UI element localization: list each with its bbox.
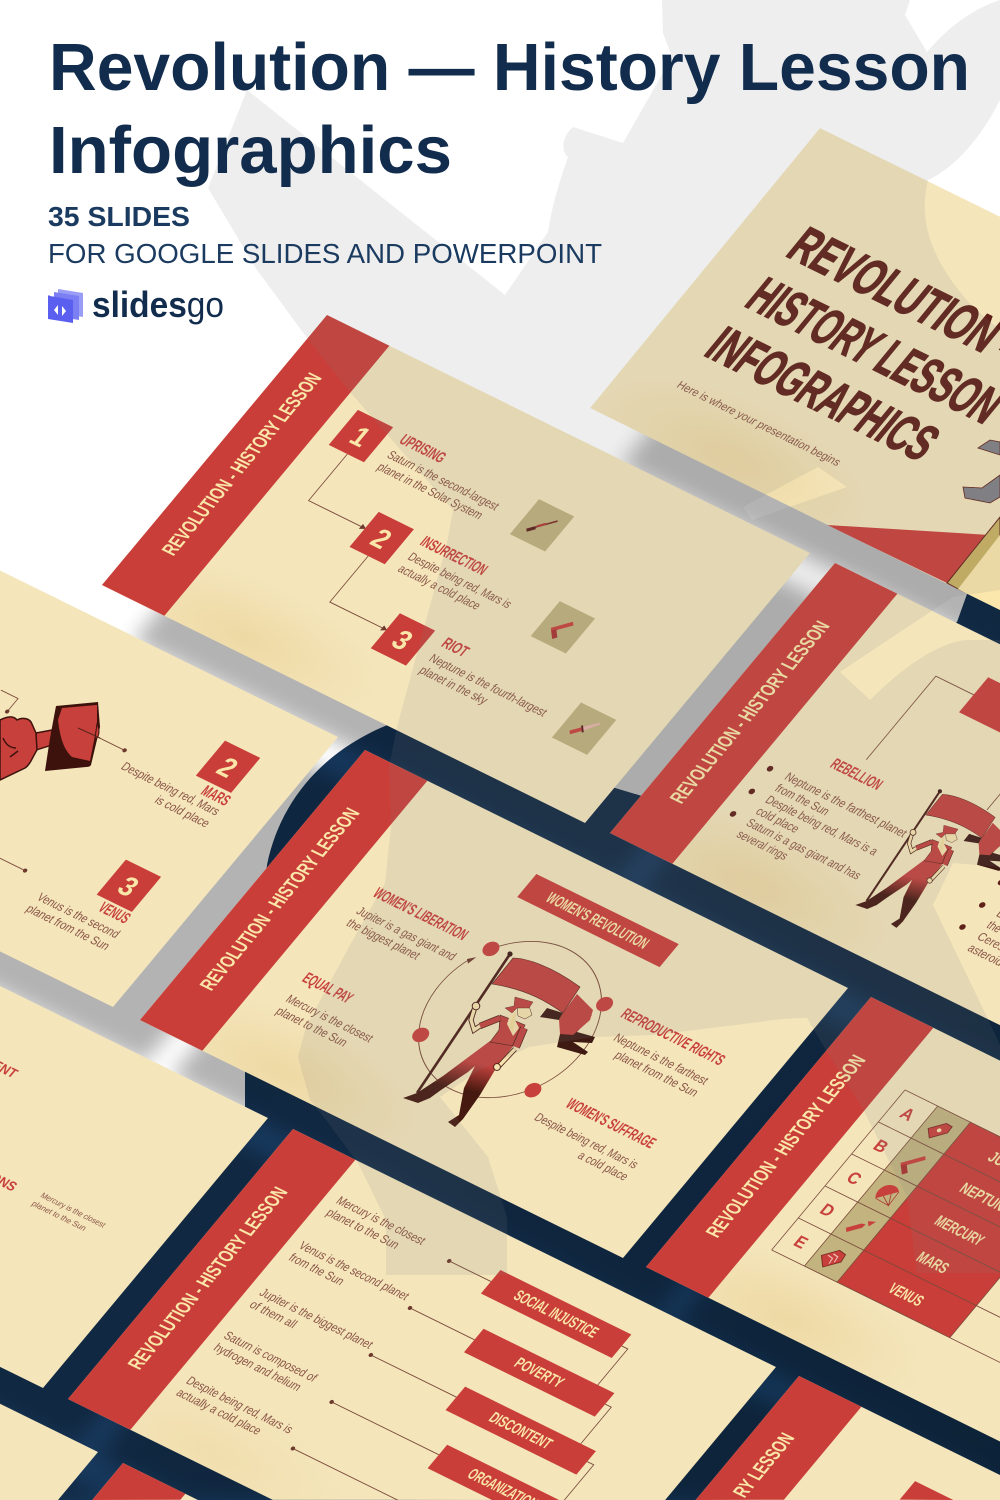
icon column <box>804 1106 970 1282</box>
title: Infographics <box>49 113 452 188</box>
descriptions: from the Sun <box>286 1251 348 1288</box>
paper stain <box>68 1129 776 1500</box>
step 2: Despite being red, Mars is <box>405 550 515 611</box>
step 1: 1 <box>343 421 377 453</box>
paper <box>68 1129 776 1500</box>
reproductive rights <box>592 1006 729 1100</box>
item 2 mars: 2 <box>210 752 245 783</box>
row letters: B <box>869 1136 892 1157</box>
bullet text left: Saturn is a gas giant and has <box>743 816 864 882</box>
equal pay: EQUAL PAY <box>298 970 357 1007</box>
bar: discontent: DISCONTENT <box>485 1410 556 1453</box>
bar: social injustice <box>481 1270 631 1358</box>
paper <box>102 315 810 823</box>
slide: cover <box>590 128 1000 646</box>
row letters: D <box>816 1200 839 1221</box>
row names: MARS <box>912 1249 952 1277</box>
equal pay: planet to the Sun <box>273 1004 351 1049</box>
icon: knife <box>552 703 616 755</box>
row names: VENUS <box>884 1281 927 1310</box>
side band <box>92 1463 185 1500</box>
connectors <box>866 676 1000 816</box>
bullets right <box>958 878 1000 931</box>
subtitle <box>48 201 602 269</box>
step 2: 2 <box>364 523 398 555</box>
descriptions <box>173 1194 453 1452</box>
step 2: INSURRECTION <box>416 534 491 579</box>
side band <box>610 563 897 864</box>
side band <box>140 750 427 1051</box>
descriptions: hydrogen and helium <box>211 1341 305 1394</box>
step 2: actually a cold place <box>395 562 484 613</box>
descriptions: Venus is the second planet <box>296 1239 413 1303</box>
small description <box>29 1190 108 1239</box>
item 3 venus: Venus is the second <box>34 890 123 941</box>
side band: REVOLUTION - HISTORY LESSON <box>123 1183 293 1373</box>
women's liberation <box>343 884 476 975</box>
subtitle: FOR GOOGLE SLIDES AND POWERPOINT <box>48 238 602 269</box>
icon: parachute <box>874 1182 900 1209</box>
side band: RY LESSON <box>728 1429 799 1500</box>
bullet text left: cold place <box>753 804 803 836</box>
women's suffrage: WOMEN'S SUFFRAGE <box>562 1096 659 1152</box>
item 2 mars <box>108 712 264 831</box>
cut-off headings <box>0 1037 88 1194</box>
icon: badge <box>928 1122 953 1138</box>
slide: table <box>646 997 1000 1500</box>
step 1: Saturn is the second-largest <box>384 448 503 513</box>
paper stain <box>102 315 810 823</box>
row letters: E <box>789 1232 812 1252</box>
small description: planet to the Sun <box>29 1199 88 1233</box>
reproductive rights: Neptune is the farthest <box>610 1031 712 1088</box>
bullet text left: from the Sun <box>772 781 833 818</box>
women's liberation: WOMEN'S LIBERATION <box>369 885 471 944</box>
subtitle: 35 SLIDES <box>48 201 190 232</box>
paper <box>646 997 1000 1500</box>
step box <box>900 1481 953 1500</box>
illustration: flag woman <box>403 951 595 1127</box>
slide: uprising timeline <box>102 315 810 823</box>
reproductive rights: planet from the Sun <box>612 1048 702 1099</box>
women's suffrage <box>521 1089 660 1183</box>
row letters: A <box>896 1104 919 1125</box>
step 3: planet in the sky <box>416 663 492 707</box>
step 2 <box>347 510 529 623</box>
bar: social injustice: SOCIAL INJUSTICE <box>510 1288 602 1341</box>
title: Revolution — History Lesson <box>49 30 970 105</box>
banner <box>517 874 679 967</box>
connector dots <box>0 695 128 873</box>
leader lines <box>293 1261 672 1500</box>
item 3 venus: VENUS <box>94 900 134 927</box>
side band <box>696 1376 861 1500</box>
step 3 <box>368 612 564 732</box>
side band: REVOLUTION - HISTORY LESSON <box>195 804 365 994</box>
women's suffrage: a cold place <box>575 1149 632 1183</box>
step 3: RIOT <box>437 635 472 661</box>
icon: rifle <box>510 499 574 552</box>
bullets left <box>728 765 775 818</box>
paper stain <box>140 750 848 1258</box>
paper <box>92 1463 198 1500</box>
paper <box>140 750 848 1258</box>
step 1: UPRISING <box>395 432 449 467</box>
side band <box>646 997 933 1298</box>
title <box>49 30 970 188</box>
slide: bottom band <box>92 1463 198 1500</box>
descriptions: planet to the Sun <box>323 1206 403 1252</box>
item 3 venus <box>23 839 165 953</box>
slide: bottom left paper <box>0 1214 98 1500</box>
illustration: fist holding hammer <box>0 702 100 780</box>
slide: women's revolution <box>140 750 848 1258</box>
slide: lower left <box>0 880 268 1388</box>
illustration: small flag woman <box>855 789 1000 928</box>
item 3 venus: 3 <box>111 871 145 902</box>
bar: organization <box>428 1445 559 1500</box>
women's liberation: Jupiter is a gas giant and <box>353 904 460 963</box>
side band: REVOLUTION - HISTORY LESSON <box>157 369 327 559</box>
icon: slidesgo logo mark <box>48 289 83 323</box>
paper <box>610 563 1000 1071</box>
bullet text left: Despite being red, Mars is a <box>762 793 881 858</box>
side band <box>102 315 389 616</box>
navy backdrop sheet <box>0 580 1000 1500</box>
connectors <box>0 690 125 871</box>
connectors <box>253 454 480 633</box>
women's liberation: the biggest planet <box>343 916 424 963</box>
slide: rebellion <box>610 563 1000 1071</box>
bullet text left: several rings <box>734 827 791 863</box>
grid lines <box>772 1090 1000 1434</box>
worker silhouette overlay <box>208 0 1000 1275</box>
side band <box>68 1129 355 1430</box>
ring dots <box>408 939 617 1100</box>
descriptions: Despite being red, Mars is <box>183 1374 296 1436</box>
bullet text right <box>965 907 1000 1000</box>
banner: WOMEN'S REVOLUTION <box>542 890 652 952</box>
icon: rank badge <box>821 1249 846 1267</box>
descriptions: of them all <box>246 1298 300 1331</box>
slide: mars and venus <box>0 499 338 1007</box>
side band: REVOLUTION - HISTORY LESSON <box>701 1051 871 1241</box>
name column <box>837 1122 1000 1338</box>
slidesgo wordmark: slidesgo <box>92 284 224 325</box>
bar: poverty: POVERTY <box>510 1355 567 1392</box>
step box <box>959 677 1000 740</box>
descriptions: Mercury is the closest <box>333 1194 429 1248</box>
row letters: C <box>842 1168 866 1189</box>
bullet text left: Neptune is the farthest planet <box>782 770 911 840</box>
reproductive rights: REPRODUCTIVE RIGHTS <box>617 1006 728 1069</box>
slide: bottom right <box>696 1376 1000 1500</box>
women's suffrage: Despite being red, Mars is <box>531 1110 642 1171</box>
step 1 <box>326 408 516 525</box>
item 2 mars: MARS <box>197 783 234 809</box>
slide: causes list <box>68 1129 776 1500</box>
equal pay <box>272 970 395 1057</box>
cover title: Here is where your presentation begins <box>674 379 843 469</box>
cover paper <box>590 128 1000 587</box>
icon: rocket <box>846 1219 876 1233</box>
bar: discontent <box>446 1387 596 1475</box>
paper <box>696 1376 1000 1500</box>
paper <box>0 880 268 1388</box>
equal pay: Mercury is the closest <box>283 992 377 1045</box>
paper <box>0 499 338 1007</box>
item 3 venus: planet from the Sun <box>23 902 113 953</box>
item 2 mars: Despite being red, Mars <box>118 760 223 818</box>
item 2 mars: is cold place <box>152 793 213 830</box>
step 3: 3 <box>385 624 419 656</box>
descriptions: actually a cold place <box>173 1386 265 1438</box>
bullet text left <box>734 770 911 898</box>
row names <box>876 1148 1000 1314</box>
paper stain <box>646 997 1000 1500</box>
descriptions: Saturn is composed of <box>221 1329 321 1385</box>
small description: Mercury is the closest <box>38 1191 108 1230</box>
descriptions: Jupiter is the biggest planet <box>256 1286 377 1352</box>
cover figure arm <box>947 440 1000 612</box>
row letters <box>789 1104 919 1253</box>
paper stain <box>0 499 338 1007</box>
side band: REVOLUTION - HISTORY LESSON <box>665 617 835 807</box>
bar: poverty <box>464 1329 614 1417</box>
cycle ring <box>381 915 639 1124</box>
cover title <box>676 226 1000 466</box>
icon: pistol <box>531 601 595 653</box>
rebellion title: REBELLION <box>826 756 886 794</box>
icon: pistol <box>900 1156 927 1175</box>
paper stain <box>0 880 268 1388</box>
leader dots <box>290 1258 452 1451</box>
step 1: planet in the Solar System <box>374 460 486 522</box>
cover red wedge <box>827 525 990 583</box>
step 3: Neptune is the fourth-largest <box>426 651 551 720</box>
paper stain <box>610 563 1000 1071</box>
